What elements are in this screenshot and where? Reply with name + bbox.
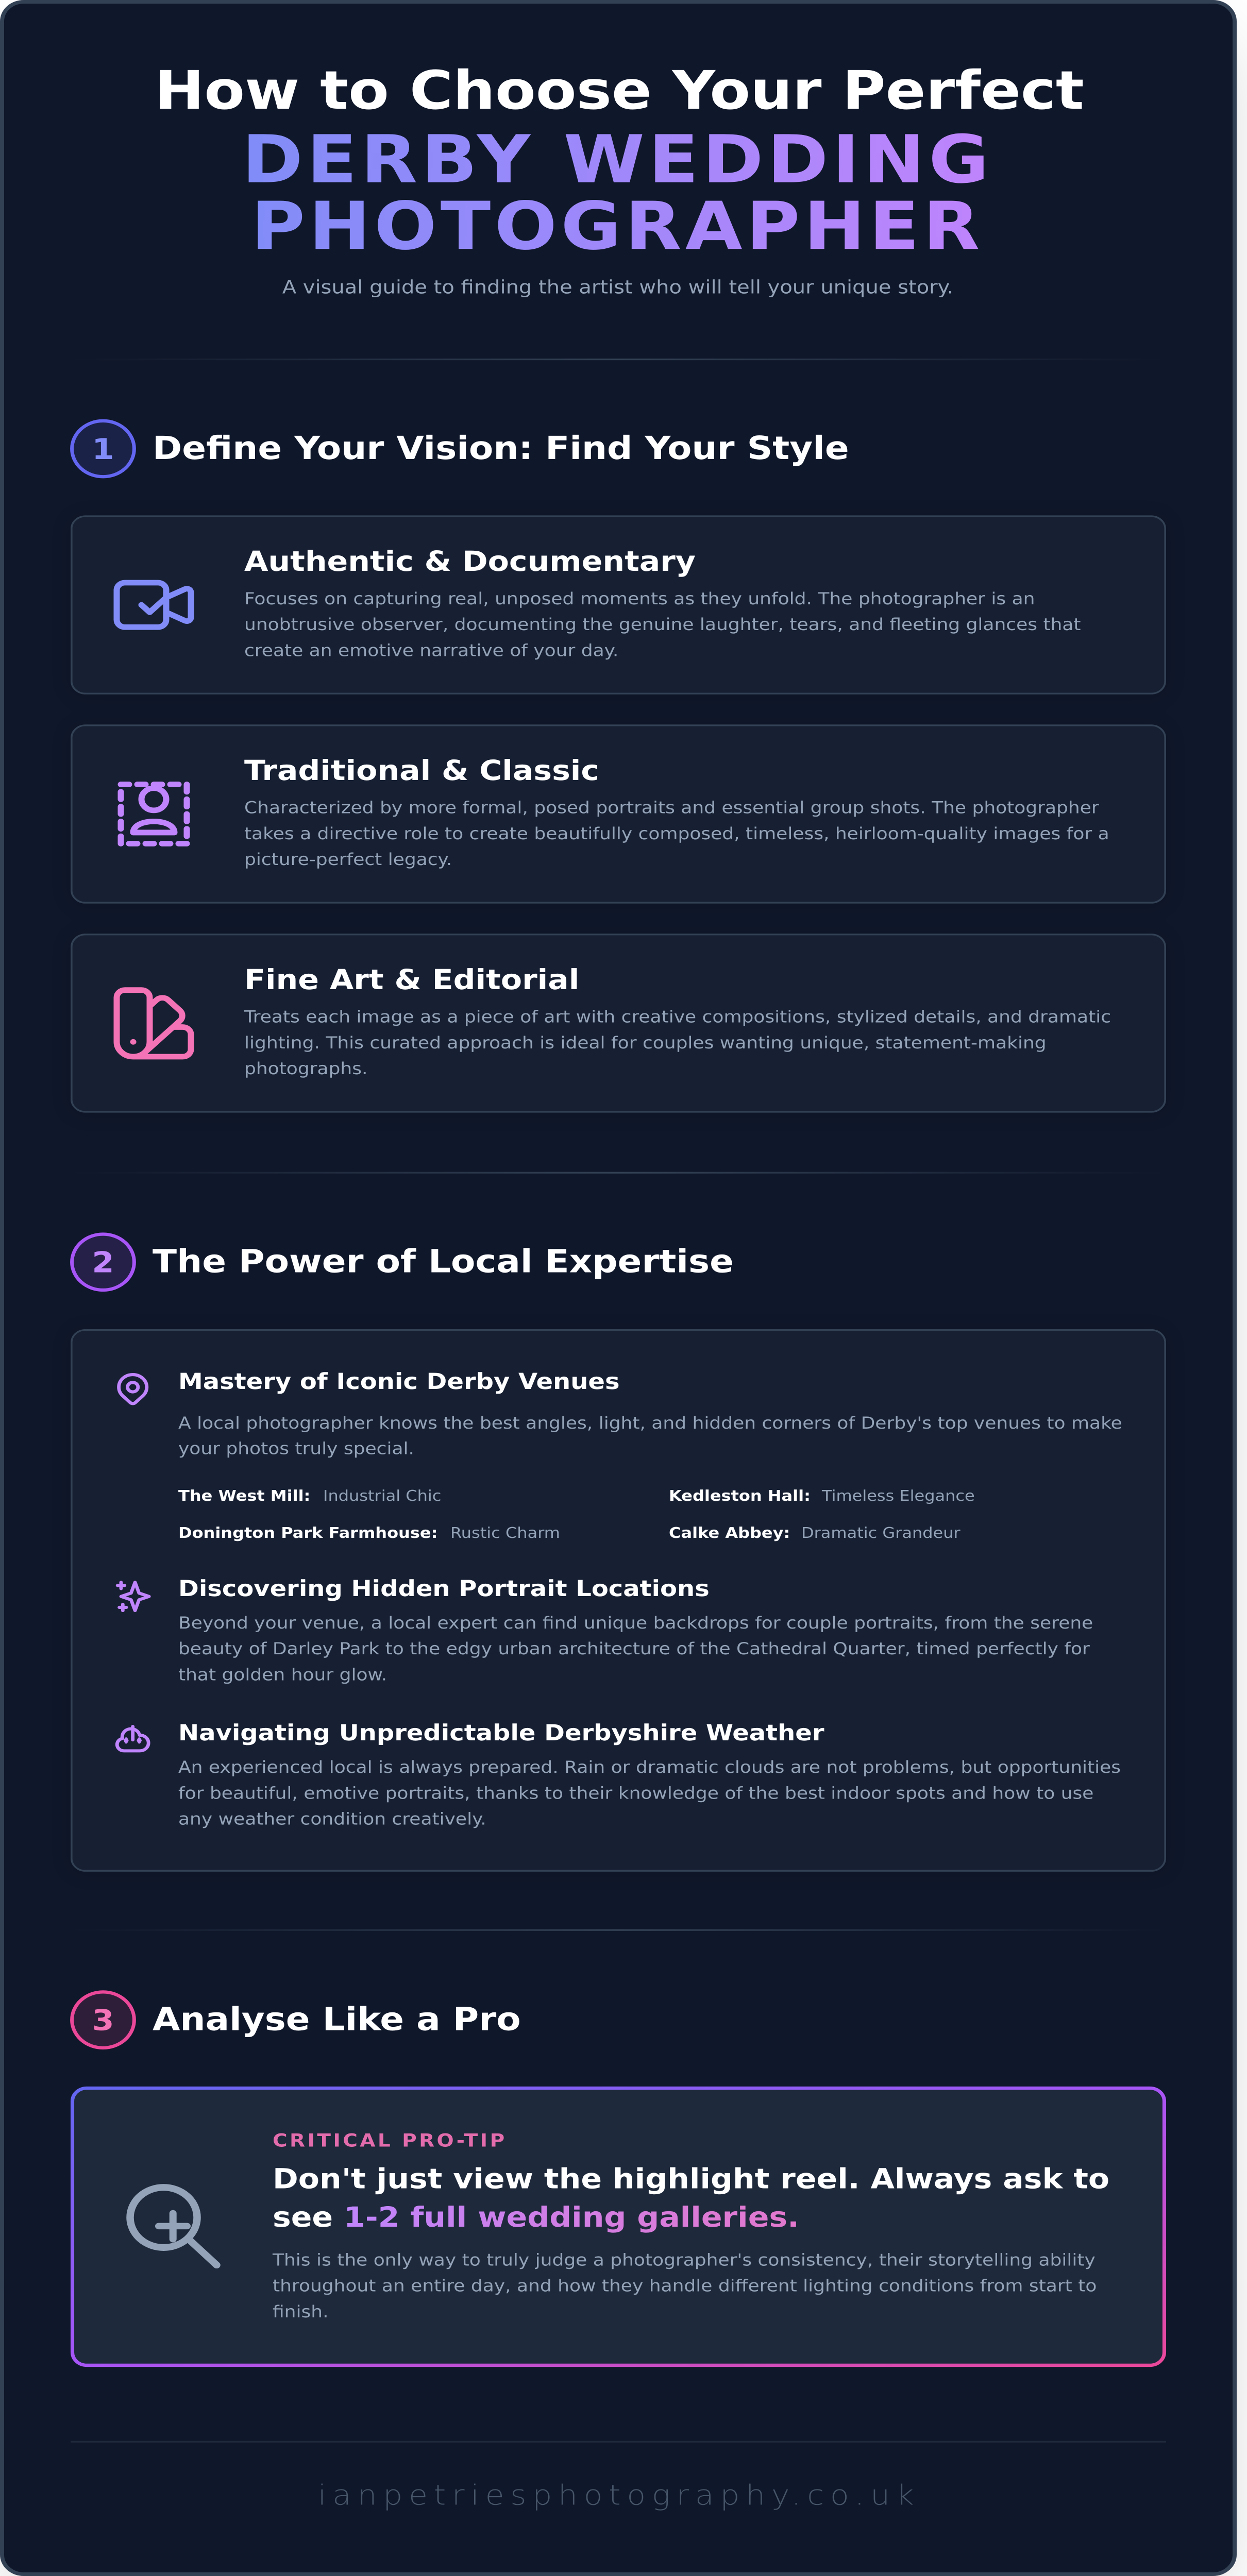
venue: Donington Park Farmhouse: Donington Park Farmhouse: [178, 1524, 437, 1541]
number badge 1: 1 [92, 432, 114, 466]
title gradient: Derby Wedding Photographer: PHOTOGRAPHER [251, 188, 984, 265]
item text: venues [178, 1414, 1122, 1458]
icon: map pin [119, 1375, 147, 1403]
item text: weather: for beautiful, emotive portraits, thanks to their knowledge of the best indoor spots and how to use [178, 1784, 1093, 1803]
item heading: venues: Mastery of Iconic Derby Venues [178, 1368, 620, 1395]
card text: photographs. [244, 1059, 367, 1078]
heading text: The Power of Local Expertise [153, 1243, 734, 1280]
icon: sparkles [117, 1582, 149, 1611]
panel: critical pro-tip [72, 2088, 1165, 2365]
section 2 heading [72, 1234, 734, 1290]
number badge 2: 2 [92, 1245, 114, 1279]
number badge 3: 3 [92, 2003, 114, 2037]
card text: picture-perfect legacy. [244, 851, 452, 869]
heading text: Analyse Like a Pro [153, 2001, 521, 2038]
card text: lighting. This curated approach is ideal for couples wanting unique, statement-making [244, 1033, 1047, 1053]
venue: Calke Abbey: Dramatic Grandeur [801, 1524, 961, 1541]
tip headline [273, 2163, 1109, 2233]
venue: The West Mill: The West Mill: [178, 1487, 310, 1504]
tip text: This is the only way to truly judge a photographer's consistency, their storytelling ability [272, 2251, 1096, 2270]
footer: website: ianpetriesphotography.co.uk [318, 2479, 920, 2512]
venue: Calke Abbey: Calke Abbey: [669, 1524, 790, 1541]
tip text: finish. [273, 2302, 329, 2321]
card text: takes a directive role to create beautifully composed, timeless, heirloom-quality images for a [244, 824, 1109, 843]
venue: The West Mill: Industrial Chic [323, 1487, 441, 1504]
venue: Kedleston Hall: Timeless Elegance [821, 1487, 975, 1504]
number badge 1 [72, 421, 134, 477]
icon: magnifier with plus [130, 2188, 216, 2265]
item heading: weather: Navigating Unpredictable Derbyshire Weather [178, 1720, 824, 1746]
tip headline: see 1-2 full wedding galleries. [273, 2201, 799, 2233]
tip label: CRITICAL PRO-TIP [273, 2130, 507, 2151]
card text: Focuses on capturing real, unposed moments as they unfold. The photographer is an [244, 589, 1035, 608]
section 1 heading [72, 421, 849, 477]
header [155, 60, 1084, 298]
card title: Authentic & Documentary [244, 546, 696, 578]
venue: Kedleston Hall: Kedleston Hall: [669, 1487, 811, 1504]
icon: cloud with rain [117, 1726, 148, 1751]
venue: Donington Park Farmhouse: Rustic Charm [450, 1524, 560, 1541]
panel: local expertise [72, 1330, 1165, 1871]
item heading: portrait locations: Discovering Hidden Portrait Locations [178, 1576, 710, 1602]
card text: Treats each image as a piece of art with creative compositions, stylized details, and dramatic [244, 1008, 1111, 1027]
card text: unobtrusive observer, documenting the genuine laughter, tears, and fleeting glances that [244, 615, 1081, 634]
panel: Traditional & Classic [72, 725, 1165, 903]
icon: portrait in dashed frame [121, 785, 187, 843]
venue: Donington Park Farmhouse [178, 1524, 560, 1541]
venue: Calke Abbey [669, 1524, 961, 1541]
item text: portrait locations [178, 1614, 1093, 1685]
tip headline: Don't just view the highlight reel. Always ask to [273, 2163, 1109, 2195]
venue: Kedleston Hall [669, 1487, 975, 1504]
card text [244, 589, 1081, 660]
card title: Fine Art & Editorial [244, 964, 579, 996]
card text [244, 1008, 1111, 1078]
item text: portrait locations: that golden hour glow. [178, 1666, 387, 1685]
item text: venues: your photos truly special. [178, 1439, 414, 1458]
title line: How to Choose Your Perfect: How to Choose Your Perfect [155, 60, 1084, 122]
venue: The West Mill [178, 1487, 441, 1504]
icon: video camera with check [116, 583, 191, 627]
card text [244, 799, 1109, 869]
card text: create an emotive narrative of your day. [244, 641, 618, 660]
tip text: throughout an entire day, and how they handle different lighting conditions from start to [273, 2277, 1097, 2296]
title gradient: Derby Wedding Photographer [242, 121, 993, 265]
panel: Fine Art & Editorial [72, 935, 1165, 1112]
item text: venues: A local photographer knows the best angles, light, and hidden corners of Derby's top venues to make [178, 1414, 1122, 1433]
panel: Authentic & Documentary [72, 516, 1165, 693]
card title: Traditional & Classic [244, 755, 599, 787]
subtitle: A visual guide to finding the artist who will tell your unique story. [282, 277, 953, 298]
item text: portrait locations: beauty of Darley Park to the edgy urban architecture of the Cathedral Quarter, timed perfectly for [178, 1639, 1090, 1658]
section 3 heading [72, 1992, 521, 2048]
item text: portrait locations: Beyond your venue, a local expert can find unique backdrops for couple portraits, from the serene [178, 1614, 1093, 1633]
heading text: Define Your Vision: Find Your Style [153, 430, 849, 467]
title gradient: Derby Wedding Photographer: DERBY WEDDING [242, 121, 993, 198]
tip text [272, 2251, 1097, 2321]
icon: colour swatch [116, 990, 191, 1057]
item text: weather: any weather condition creatively. [178, 1810, 486, 1829]
number badge 2 [72, 1234, 134, 1290]
card text: Characterized by more formal, posed portraits and essential group shots. The photographer [244, 799, 1099, 818]
item text: weather [178, 1758, 1121, 1829]
item text: weather: An experienced local is always prepared. Rain or dramatic clouds are not problems, but opportunities [178, 1758, 1121, 1777]
number badge 3 [72, 1992, 134, 2048]
